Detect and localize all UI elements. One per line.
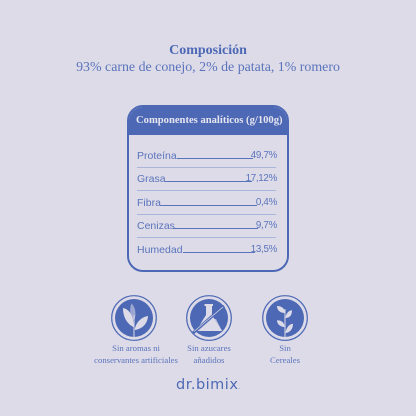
row: fibra: Fibra: [137, 197, 161, 209]
row: grasa: [137, 173, 277, 185]
panel header: Componentes analíticos (g/100g): [136, 115, 283, 126]
panel: analytical components: [127, 105, 289, 272]
row: grasa: 17,12%: [246, 173, 277, 184]
caption: no sugars: [187, 343, 231, 364]
panel header: [129, 107, 287, 135]
row: humedad: 13,5%: [251, 244, 277, 255]
caption: no sugars: Sin azucares: [187, 343, 231, 353]
row: cenizas: 9,7%: [256, 220, 277, 231]
row: fibra: 0,4%: [256, 197, 277, 208]
icon: no cereals: [262, 295, 308, 341]
row: proteína: Proteína: [137, 150, 177, 162]
caption: no cereals: Sin: [279, 343, 291, 353]
row: grasa: Grasa: [137, 173, 166, 185]
row: cenizas: Cenizas: [137, 220, 175, 232]
row: humedad: Humedad: [137, 244, 183, 256]
caption: no cereals: [270, 343, 300, 364]
caption: no aromas: Sin aromas ni: [112, 343, 160, 353]
icon: no sugars flask: [186, 295, 232, 341]
row: fibra: [137, 197, 277, 209]
title: Composición: [169, 43, 247, 58]
caption: no aromas: conservantes artificiales: [94, 354, 178, 364]
icon: no aromas leaf: [111, 295, 157, 341]
row: proteína: 49,7%: [251, 150, 277, 161]
caption: no aromas: [94, 343, 178, 364]
composition text: 93% carne de conejo, 2% de patata, 1% romero: [76, 60, 340, 75]
caption: no sugars: añadidos: [194, 354, 224, 364]
row: humedad: [137, 244, 277, 256]
logo: dr.bimix.: [176, 377, 241, 393]
row: proteína: [137, 150, 277, 162]
caption: no cereals: Cereales: [270, 354, 300, 364]
row: cenizas: [137, 220, 277, 232]
